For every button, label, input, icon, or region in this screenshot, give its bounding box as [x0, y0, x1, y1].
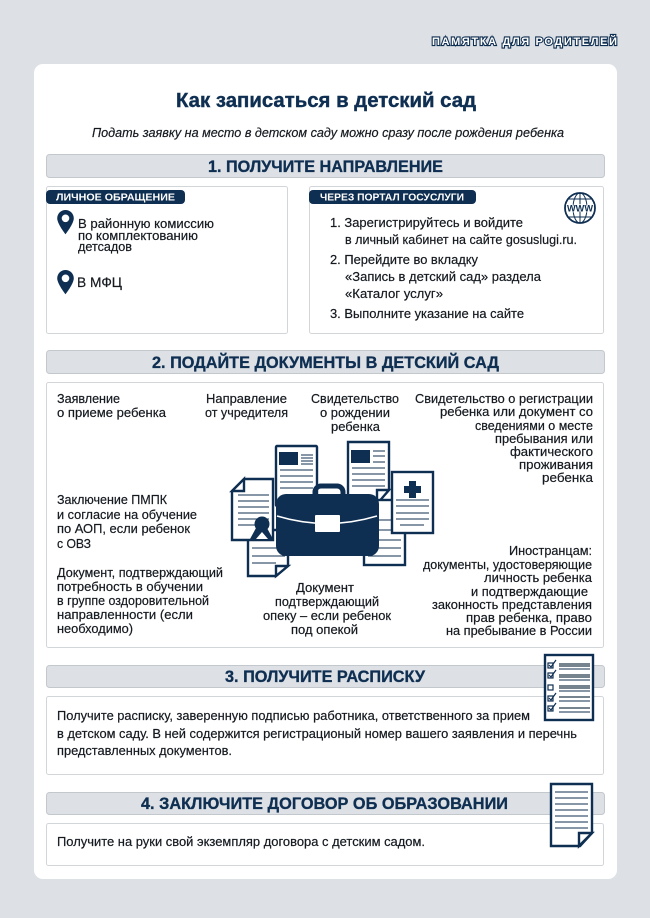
- text: need document: направленности (если: [57, 608, 193, 622]
- badge: personal visit: ЛИЧНОЕ ОБРАЩЕНИЕ: [56, 192, 175, 204]
- steps list: «Запись в детский сад» раздела: [345, 270, 541, 284]
- text: MFC: В МФЦ: [77, 275, 122, 290]
- text: birth certificate: Свидетельство: [311, 392, 399, 406]
- steps list: 2. Перейдите во вкладку: [330, 253, 479, 267]
- text: district commission: детсадов: [78, 240, 132, 254]
- steps list: в личный кабинет на сайте gosuslugi.ru.: [345, 233, 577, 247]
- text: guardianship: подтверждающий: [275, 595, 379, 609]
- document: bottom left: [248, 530, 288, 576]
- text: PMPK conclusion: и согласие на обучение: [57, 508, 197, 522]
- section 2 heading: 2. ПОДАЙТЕ ДОКУМЕНТЫ В ДЕТСКИЙ САД: [152, 353, 499, 372]
- document: top right: [348, 442, 389, 505]
- text: receipt details: представленных документов.: [57, 744, 232, 758]
- section 4 heading: [46, 792, 604, 814]
- section 2 heading: [46, 350, 604, 374]
- document: certificate: [232, 479, 273, 540]
- text: PMPK conclusion: по АОП, если ребенок: [57, 522, 191, 536]
- badge: portal: [309, 190, 476, 204]
- text: receipt details: в детском саду. В ней содержится регистрационый номер вашего заявления и перечнь: [57, 727, 577, 741]
- text: PMPK conclusion: [57, 493, 197, 551]
- subtitle: Подать заявку на место в детском саду можно сразу после рождения ребенка: [92, 125, 564, 140]
- icon: map pin: [57, 270, 74, 294]
- text: need document: потребность в обучении: [57, 580, 203, 594]
- text: PMPK conclusion: Заключение ПМПК: [57, 493, 168, 507]
- main card: [34, 64, 617, 879]
- text: foreigners: документы, удостоверяющие: [423, 558, 592, 572]
- text: guardianship: под опекой: [291, 623, 358, 637]
- text: need document: Документ, подтверждающий: [57, 566, 223, 580]
- text: district commission: по комплектованию: [78, 229, 198, 243]
- text: guardianship: [263, 581, 392, 637]
- panel: contract: [46, 824, 604, 866]
- section 3 heading: 3. ПОЛУЧИТЕ РАСПИСКУ: [225, 667, 425, 686]
- icon: checklist: [545, 655, 593, 720]
- badge: personal visit: [46, 190, 185, 204]
- document: top left: [276, 446, 317, 506]
- text: registration certificate: пребывания или: [495, 432, 593, 446]
- text: referral: Направление: [206, 392, 287, 406]
- text: district commission: [78, 217, 214, 254]
- section 1 heading: 1. ПОЛУЧИТЕ НАПРАВЛЕНИЕ: [208, 157, 443, 176]
- text: birth certificate: [311, 392, 399, 434]
- text: referral: [205, 392, 288, 420]
- header label: ПАМЯТКА ДЛЯ РОДИТЕЛЕЙ: [432, 35, 617, 48]
- text: need document: в группе оздоровительной: [57, 594, 209, 608]
- text: registration certificate: проживания: [519, 458, 593, 472]
- text: receipt details: Получите расписку, заверенную подписью работника, ответственного за прием: [57, 709, 530, 723]
- section 3 heading: [46, 666, 604, 688]
- panel: personal visit: [46, 186, 288, 334]
- panel: documents: [46, 382, 604, 648]
- icon: www globe: [565, 193, 595, 223]
- text: registration certificate: фактического: [510, 445, 593, 459]
- text: referral: от учредителя: [205, 406, 288, 420]
- text: foreigners: на пребывание в России: [446, 624, 592, 638]
- text: receipt details: [57, 709, 577, 758]
- panel: receipt: [46, 696, 604, 774]
- section 1 heading: [46, 154, 604, 178]
- icon: map pin: [57, 210, 74, 234]
- text: application: Заявление: [57, 392, 120, 406]
- text: registration certificate: Свидетельство о регистрации: [415, 392, 593, 406]
- steps list: «Каталог услуг»: [345, 287, 443, 301]
- text: district commission: В районную комиссию: [78, 217, 214, 231]
- text: application: [57, 392, 166, 420]
- text: guardianship: Документ: [296, 581, 354, 595]
- text: need document: [57, 566, 223, 636]
- briefcase: [276, 486, 379, 556]
- text: need document: необходимо): [57, 622, 133, 636]
- text: birth certificate: о рождении: [320, 406, 390, 420]
- icon: www globe: WWW: [567, 204, 594, 214]
- text: registration certificate: сведениями о месте: [475, 419, 593, 433]
- steps list: 1. Зарегистрируйтесь и войдите: [330, 216, 523, 230]
- text: guardianship: опеку – если ребенок: [263, 609, 392, 623]
- text: registration certificate: [415, 392, 593, 485]
- text: foreigners: Иностранцам:: [509, 544, 592, 558]
- icon: briefcase with documents: [232, 442, 433, 576]
- document: back right: [364, 500, 405, 565]
- text: PMPK conclusion: с ОВЗ: [57, 537, 91, 551]
- text: registration certificate: ребенка: [542, 471, 593, 485]
- text: birth certificate: ребенка: [331, 420, 380, 434]
- badge: portal: ЧЕРЕЗ ПОРТАЛ ГОСУСЛУГИ: [320, 192, 464, 204]
- steps list: [330, 216, 577, 321]
- steps list: 3. Выполните указание на сайте: [330, 307, 524, 321]
- text: application: о приеме ребенка: [57, 406, 166, 420]
- text: registration certificate: ребенка или документ со: [440, 405, 593, 419]
- section 4 heading: 4. ЗАКЛЮЧИТЕ ДОГОВОР ОБ ОБРАЗОВАНИИ: [141, 794, 508, 813]
- text: foreigners: законность представления: [432, 598, 592, 612]
- document: medical: [392, 472, 433, 533]
- icon: contract document: [551, 784, 592, 846]
- text: foreigners: личность ребенка: [484, 571, 592, 585]
- text: contract details: Получите на руки свой экземпляр договора с детским садом.: [57, 835, 425, 849]
- panel: gosuslugi portal: [309, 186, 604, 334]
- text: foreigners: и подтверждающие: [471, 585, 588, 599]
- text: foreigners: [423, 544, 592, 638]
- title: Как записаться в детский сад: [176, 90, 476, 112]
- text: foreigners: прав ребенка, право: [466, 611, 592, 625]
